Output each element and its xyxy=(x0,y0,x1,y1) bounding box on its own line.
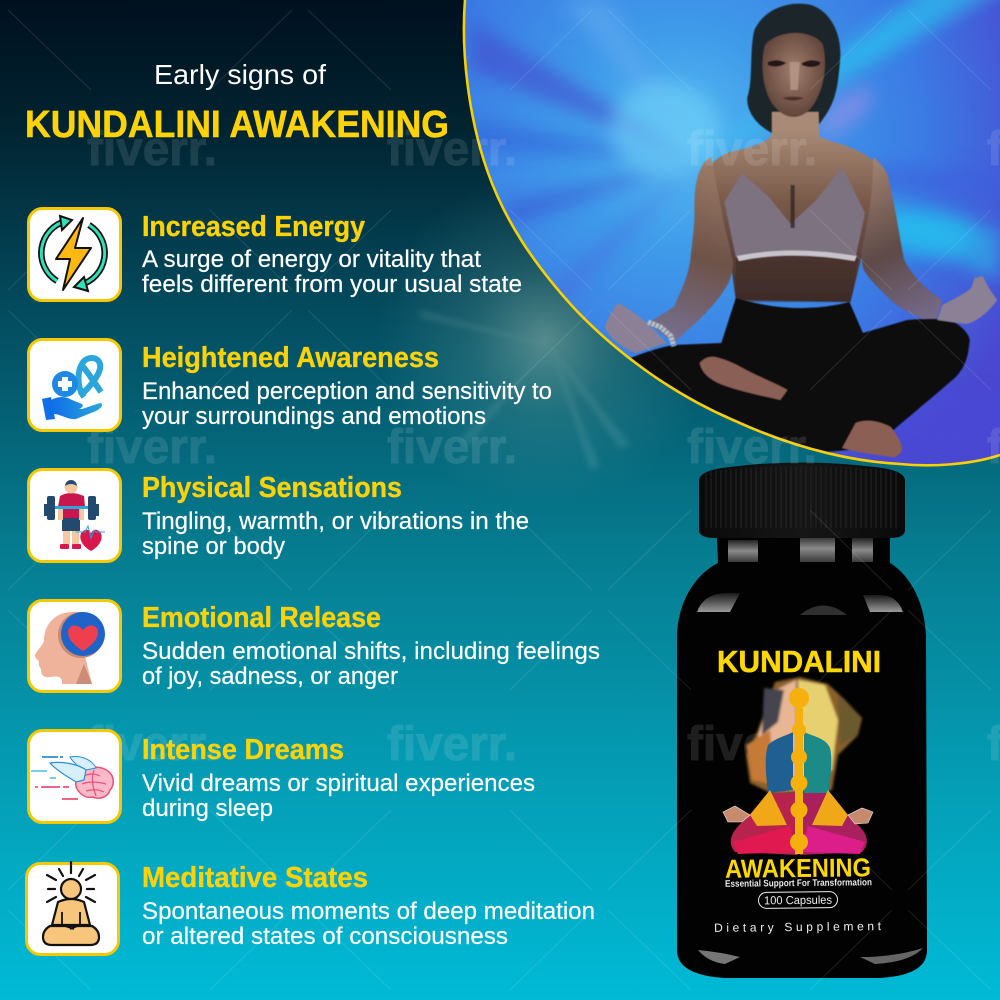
description xyxy=(142,378,552,430)
chakra spine xyxy=(789,688,809,854)
bottle label xyxy=(714,644,882,935)
bra xyxy=(724,167,866,258)
watermarks: fiverr. xyxy=(87,718,217,771)
item: increased energy xyxy=(28,208,522,300)
description xyxy=(142,638,600,690)
item: heightened awareness xyxy=(28,340,552,430)
label subtitle: AWAKENING xyxy=(725,852,871,884)
cap xyxy=(699,462,905,538)
light rays xyxy=(470,0,1000,457)
back foot xyxy=(842,421,902,457)
watermarks: fiverr. xyxy=(687,123,817,176)
yellow arc xyxy=(464,0,1000,465)
torso xyxy=(712,111,874,303)
description: spine or body xyxy=(142,533,285,560)
pants xyxy=(630,298,970,454)
description xyxy=(142,246,522,298)
description: during sleep xyxy=(142,795,273,822)
label title: KUNDALINI xyxy=(717,644,881,679)
tattoo xyxy=(791,185,795,228)
chakra figure art xyxy=(723,677,873,855)
description: of joy, sadness, or anger xyxy=(142,663,398,690)
description: Vivid dreams or spiritual experiences xyxy=(142,770,535,797)
abdomen shading xyxy=(736,253,859,302)
label tagline: Essential Support For Transformation xyxy=(725,877,872,890)
item: meditative states xyxy=(26,862,595,954)
front foot xyxy=(700,357,787,400)
heading: Physical Sensations xyxy=(142,472,402,504)
watermarks: fiverr. xyxy=(87,421,217,474)
light burst xyxy=(375,170,715,510)
heading: Meditative States xyxy=(142,862,368,894)
description: or altered states of consciousness xyxy=(142,923,508,950)
panel: meditation photo circle xyxy=(464,0,1000,465)
watermarks: fiverr. xyxy=(387,123,517,176)
heading: Heightened Awareness xyxy=(142,342,439,374)
watermarks: fiverr. xyxy=(387,718,517,771)
watermarks: fiverr. xyxy=(687,718,817,771)
dietary supplement: Dietary Supplement xyxy=(714,919,882,935)
title xyxy=(25,59,449,146)
title: KUNDALINI AWAKENING xyxy=(25,104,449,146)
left arm xyxy=(648,157,733,343)
icon: meditating figure xyxy=(26,862,118,954)
hair front xyxy=(769,34,782,41)
face xyxy=(763,33,825,117)
hair xyxy=(747,4,840,136)
watermarks: fiverr. xyxy=(687,421,817,474)
description: Tingling, warmth, or vibrations in the xyxy=(142,508,529,535)
description xyxy=(142,508,529,560)
bottle body xyxy=(677,538,927,978)
description: Enhanced perception and sensitivity to xyxy=(142,378,552,405)
heading: Increased Energy xyxy=(142,211,365,243)
item: emotional release xyxy=(28,600,600,692)
item: intense dreams xyxy=(28,730,535,822)
icon: energy bolt xyxy=(28,208,120,300)
left hand xyxy=(605,303,667,353)
description: feels different from your usual state xyxy=(142,271,522,298)
icon: weightlifter and heart xyxy=(28,470,120,562)
description: your surroundings and emotions xyxy=(142,403,486,430)
heading: Intense Dreams xyxy=(142,734,344,766)
icon: winged brain xyxy=(28,730,120,822)
description: Sudden emotional shifts, including feelings xyxy=(142,638,600,665)
hands xyxy=(723,806,873,824)
title: Early signs of xyxy=(154,59,326,90)
bracelet xyxy=(648,322,674,346)
description: A surge of energy or vitality that xyxy=(142,246,481,273)
description xyxy=(142,898,595,950)
woman xyxy=(605,4,997,457)
product bottle xyxy=(677,462,927,978)
right hand xyxy=(937,276,997,324)
capsule count pill: 100 Capsules xyxy=(764,895,832,907)
right arm xyxy=(861,157,942,323)
icon: head with heart xyxy=(28,600,120,692)
bottle shine xyxy=(697,535,923,964)
capsule count pill xyxy=(758,892,838,908)
item: physical sensations xyxy=(28,470,529,562)
description: Spontaneous moments of deep meditation xyxy=(142,898,595,925)
description xyxy=(142,770,535,822)
meditating silhouette xyxy=(766,732,793,793)
watermarks: fiverr. xyxy=(87,123,217,176)
heading: Emotional Release xyxy=(142,602,381,634)
watermarks: fiverr. xyxy=(387,421,517,474)
icon: care hand and ribbon xyxy=(28,340,120,430)
watermarks xyxy=(87,123,1000,771)
